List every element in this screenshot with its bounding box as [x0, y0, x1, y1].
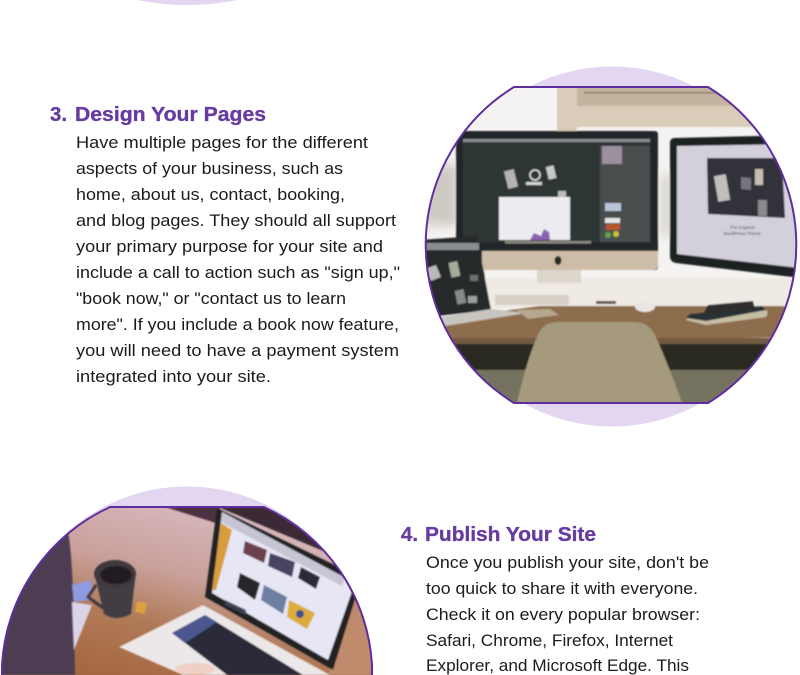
section 4 body text: Safari, Chrome, Firefox, Internet [426, 631, 673, 650]
laptop body [119, 605, 330, 675]
laptop [426, 236, 522, 327]
phone [516, 309, 559, 319]
person hair [0, 528, 75, 675]
top decorative circle remnant [137, 0, 238, 5]
imac stand [537, 268, 581, 283]
section 3 heading: Design Your Pages [75, 103, 266, 126]
shirt sleeve [72, 580, 92, 602]
photo: desk with monitors [420, 80, 800, 410]
section 3 body text: integrated into your site. [76, 367, 271, 386]
wooden desk [445, 305, 785, 339]
photo: laptop on wooden table [0, 500, 380, 675]
section 4 body text: Once you publish your site, don't be [426, 553, 709, 572]
hand [175, 663, 215, 675]
window frame [556, 88, 753, 132]
section 3 body text [76, 133, 400, 386]
coffee mug [88, 560, 136, 618]
blurred background [424, 165, 458, 225]
section 3 body text: your primary purpose for your site and [76, 237, 383, 256]
purple outline of desk photo [426, 87, 796, 403]
floor [475, 369, 748, 402]
section 3 body text: Have multiple pages for the different [76, 133, 368, 152]
lavender circle behind desk photo [432, 66, 792, 426]
orange packet [135, 601, 147, 614]
section 3 body text: home, about us, contact, booking, [76, 185, 345, 204]
imac [456, 131, 658, 270]
chair [517, 322, 682, 403]
section 3 body text: and blog pages. They should all support [76, 211, 396, 230]
desk top [484, 276, 792, 309]
section 4 heading: 4. [401, 523, 418, 546]
section 3 body text: "book now," or "contact us to learn [76, 289, 346, 308]
right monitor: The Inspired [729, 225, 755, 230]
mouse [635, 302, 655, 312]
section 4 body text [426, 553, 709, 675]
section 4 body text: Explorer, and Microsoft Edge. This [426, 656, 689, 675]
section 3 heading: 3. [50, 103, 67, 126]
section 4 heading: Publish Your Site [425, 523, 596, 546]
lavender circle behind laptop photo [7, 487, 367, 675]
background dark band [165, 507, 220, 523]
section 4 body text: too quick to share it with everyone. [426, 579, 698, 598]
section 4 body text: Check it on every popular browser: [426, 605, 700, 624]
section 3 body text: aspects of your business, such as [76, 159, 343, 178]
notebooks [686, 301, 768, 325]
keyboard [495, 295, 569, 305]
screen thumbnails [225, 541, 320, 629]
laptop screen [212, 512, 355, 660]
section 3 body text: you will need to have a payment system [76, 341, 399, 360]
purple outline of laptop photo [2, 507, 372, 675]
keyboard [172, 622, 303, 675]
section 3 body text: more". If you include a book now feature, [76, 315, 399, 334]
right side wood [328, 598, 371, 675]
laptop screen frame [205, 508, 358, 670]
right monitor: WordPress Theme [723, 231, 761, 236]
section 3 body text: include a call to action such as "sign up," [76, 263, 400, 282]
right monitor [670, 135, 800, 278]
under desk shadow [455, 343, 767, 371]
